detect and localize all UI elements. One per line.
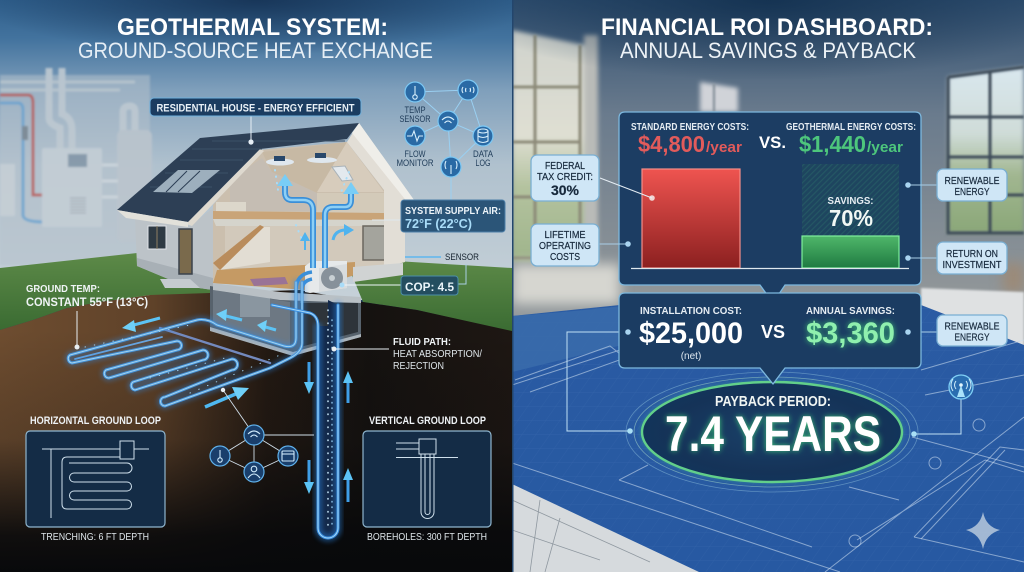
panel: geothermal system: [0, 0, 512, 572]
standard energy costs: STANDARD ENERGY COSTS:: [631, 121, 749, 133]
standard energy costs: [631, 123, 748, 156]
callout: federal tax credit: FEDERAL: [545, 161, 585, 172]
background: blueprint: [512, 288, 1024, 572]
house: basement: [210, 283, 361, 356]
geothermal energy costs: [786, 123, 916, 156]
panel: installation cost vs annual savings: [619, 293, 921, 384]
callout: renewable energy: RENEWABLE: [944, 176, 1000, 187]
callout: system supply air: 72°F (22°C): [405, 216, 472, 231]
heading: vertical ground loop: VERTICAL GROUND LOOP: [369, 415, 486, 427]
caption: trenching depth: TRENCHING: 6 FT DEPTH: [41, 531, 149, 543]
installation cost: INSTALLATION COST:: [640, 305, 742, 317]
icon network: smart sensors: LOG: [476, 158, 490, 169]
label: fluid path: REJECTION: [393, 360, 444, 372]
icon: antenna: [949, 375, 973, 399]
arrows: indoor supply air ducts: [275, 170, 359, 290]
house: cutaway interior: [213, 142, 392, 290]
background: mechanical room: [0, 66, 152, 226]
vs label: VS: [761, 322, 785, 342]
callout: return on investment: [905, 242, 1007, 274]
ground loop pipes: [68, 282, 338, 538]
callout: renewable energy: [905, 169, 1007, 201]
heading: horizontal ground loop: HORIZONTAL GROUND LOOP: [30, 415, 161, 427]
label: residential house: RESIDENTIAL HOUSE - ENERGY EFFICIENT: [156, 102, 355, 114]
icon: heat pump unit: [305, 261, 347, 293]
diagram: horizontal ground loop: [26, 415, 165, 543]
icon network: smart sensors: FLOW: [404, 149, 426, 160]
title: financial ROI dashboard: FINANCIAL ROI DASHBOARD:: [601, 14, 933, 41]
title: geothermal system: GEOTHERMAL SYSTEM:: [117, 14, 388, 41]
callout: renewable energy 2: RENEWABLE: [944, 322, 1000, 332]
label: residential house: [150, 98, 361, 145]
callout: lifetime operating costs: LIFETIME: [544, 230, 586, 241]
connector dots: payback badge: [627, 428, 917, 437]
label: ground temperature: [26, 283, 148, 350]
geothermal energy costs: $1,440: [799, 131, 866, 157]
callout: lifetime operating costs: OPERATING: [539, 241, 591, 252]
geothermal energy costs: GEOTHERMAL ENERGY COSTS:: [786, 121, 916, 133]
bar: standard cost: [642, 169, 740, 268]
payback period badge: [626, 372, 918, 492]
label: ground temperature: GROUND TEMP:: [26, 283, 100, 295]
callout: system supply air: SYSTEM SUPPLY AIR:: [405, 205, 501, 217]
ground: grass: [0, 253, 512, 332]
title: financial ROI dashboard: [602, 18, 931, 58]
label: ground temperature: CONSTANT 55°F (13°C): [26, 297, 148, 309]
house: [117, 123, 414, 356]
callout: lifetime operating costs: COSTS: [550, 252, 580, 263]
callout: lifetime operating costs: [531, 224, 631, 266]
payback period badge: PAYBACK PERIOD:: [715, 394, 831, 410]
annual savings: ANNUAL SAVINGS:: [806, 305, 895, 317]
caption: boreholes depth: BOREHOLES: 300 FT DEPTH: [367, 531, 487, 543]
icon network: smart sensors: SENSOR: [400, 114, 431, 125]
ground: soil: [0, 290, 512, 572]
label: fluid path: [332, 338, 482, 369]
house: left wall: [135, 208, 213, 290]
standard energy costs: $4,800: [638, 131, 705, 157]
panel edge: [512, 0, 514, 572]
callout: renewable energy 2: [937, 315, 1007, 346]
label: fluid path: HEAT ABSORPTION/: [393, 348, 482, 360]
standard energy costs: /year: [706, 139, 742, 156]
callout: COP: [340, 276, 458, 295]
callout: federal tax credit: [531, 155, 652, 201]
installation cost: [639, 305, 743, 362]
panel: energy cost comparison: [619, 112, 921, 303]
house: gable fascia: [186, 123, 414, 282]
panel: financial ROI dashboard: [512, 0, 1024, 572]
callout: federal tax credit: TAX CREDIT:: [537, 172, 593, 183]
installation cost: $25,000: [639, 317, 743, 350]
icon network: smart sensors: TEMP: [404, 105, 426, 116]
title: geothermal system: [79, 18, 432, 58]
callout: renewable energy 2: ENERGY: [954, 332, 990, 344]
schematic: borehole: [363, 431, 491, 527]
callout: return on investment: RETURN ON: [946, 249, 998, 260]
callout: COP: COP: 4.5: [405, 280, 454, 294]
connector: cost to payback: [567, 332, 961, 434]
bar: geothermal cost with savings: [802, 164, 899, 268]
annual savings: $3,360: [806, 317, 895, 350]
payback period badge: 7.4 YEARS: [665, 406, 881, 462]
callout: renewable energy: ENERGY: [954, 187, 990, 198]
arrows: ground flow direction: [122, 309, 353, 502]
diagram: vertical ground loop: [363, 415, 491, 543]
schematic: serpentine trench: [26, 431, 165, 527]
background: blurred room: [514, 0, 1024, 345]
callout: return on investment: INVESTMENT: [942, 260, 1002, 271]
vs label: VS.: [759, 133, 786, 152]
icon: sparkle watermark: [966, 512, 1000, 549]
house: roof: [117, 123, 359, 227]
icon network: smart sensors: [396, 80, 494, 200]
callout: federal tax credit: 30%: [551, 182, 580, 198]
label: sensor: [405, 252, 479, 284]
background: sky: [0, 0, 512, 300]
callout: system supply air: [372, 200, 505, 232]
icon network: smart sensors: DATA: [473, 149, 494, 160]
label: sensor: SENSOR: [445, 252, 479, 263]
installation cost: (net): [681, 351, 701, 362]
geothermal energy costs: /year: [867, 139, 903, 156]
icon network: underground monitoring: [210, 388, 314, 482]
icon network: smart sensors: MONITOR: [396, 158, 434, 169]
bar: geothermal cost with savings: SAVINGS:: [828, 195, 874, 207]
label: fluid path: FLUID PATH:: [393, 336, 451, 348]
title: financial ROI dashboard: ANNUAL SAVINGS & PAYBACK: [620, 38, 916, 63]
title: geothermal system: GROUND-SOURCE HEAT EXCHANGE: [78, 38, 433, 63]
bar: geothermal cost with savings: 70%: [829, 205, 873, 231]
